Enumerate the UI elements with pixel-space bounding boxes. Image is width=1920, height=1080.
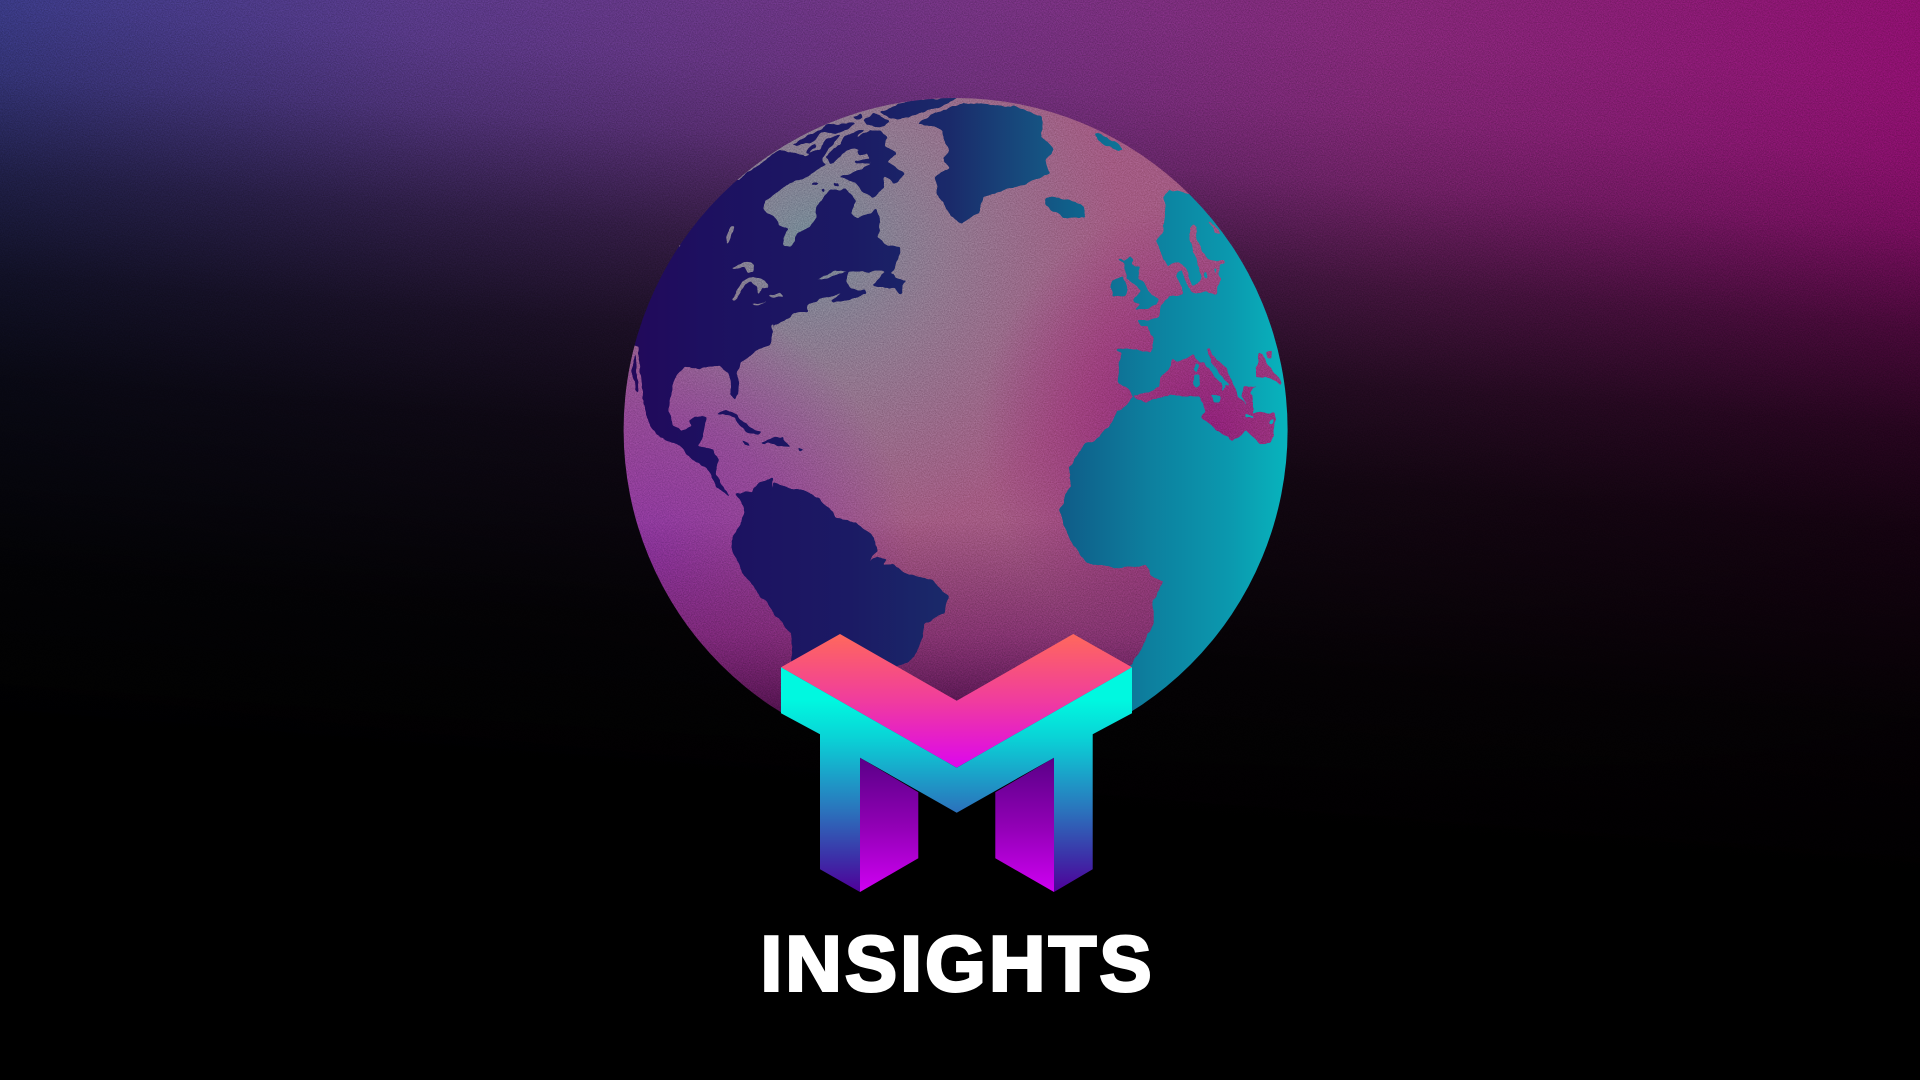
globe	[620, 95, 1295, 765]
continent: Europe and Africa	[1045, 190, 1288, 711]
logo: left inner pillar	[860, 758, 918, 892]
continent: Greenland	[918, 100, 1056, 226]
ocean	[620, 95, 1292, 765]
logo: front face	[781, 667, 1132, 892]
logo: right inner pillar	[995, 758, 1054, 892]
continent: South America	[725, 475, 960, 690]
continent: North and Central America	[620, 96, 965, 501]
logo: isometric M	[781, 634, 1132, 892]
title: INSIGHTS: INSIGHTS	[760, 920, 1152, 1008]
island: Svalbard	[1095, 133, 1122, 151]
logo: top face	[781, 634, 1132, 768]
